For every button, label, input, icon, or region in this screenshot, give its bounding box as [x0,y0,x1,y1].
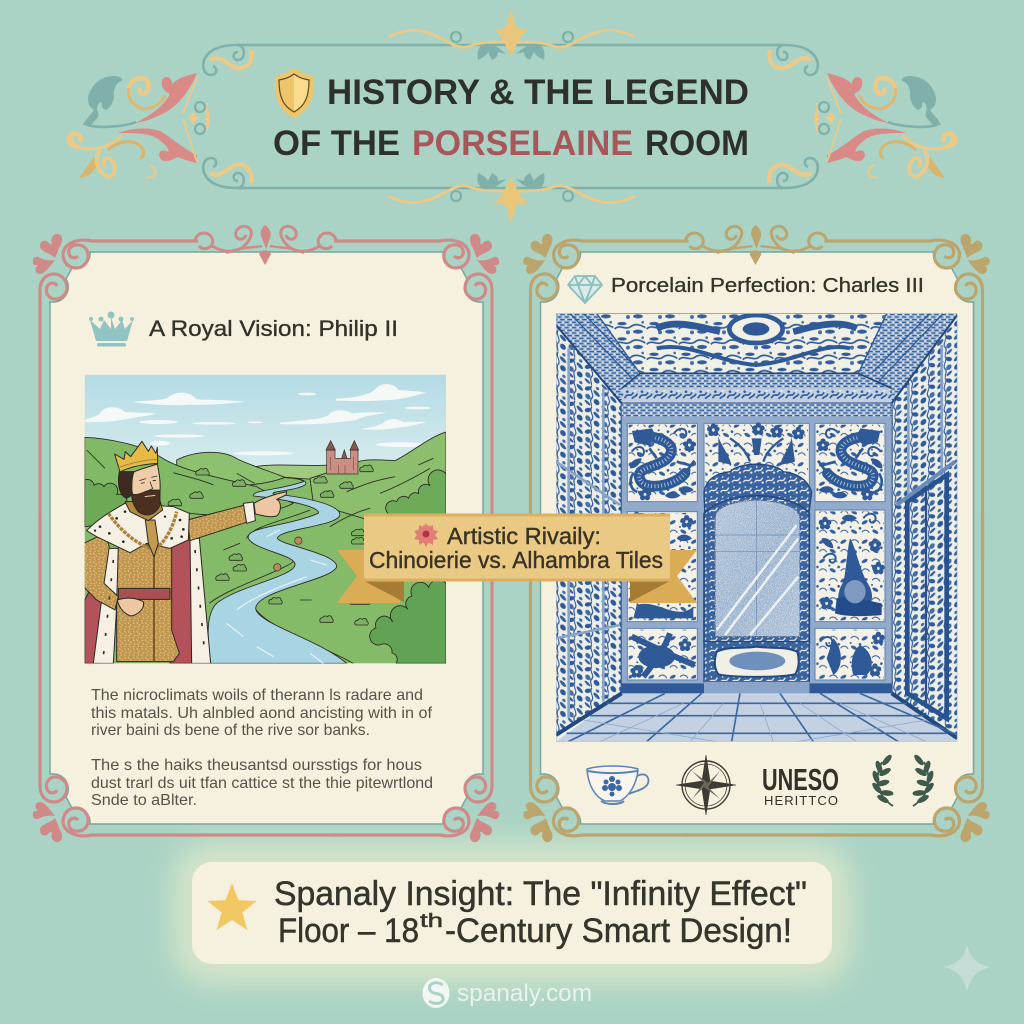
illustration: porcelain room [556,313,957,742]
baseboard [622,683,892,693]
icon: shield [275,68,314,118]
right arm [187,505,248,541]
castle [326,441,359,474]
facial features [139,476,157,490]
background glow [172,842,852,984]
figural tiles [630,512,885,678]
heading: A Royal Vision: A Royal Vision: Philip II [149,316,398,341]
cuff [243,502,255,523]
icon: teacup [587,766,648,804]
face [132,464,161,494]
body text: river baini ds bene of the rive sor banks. [91,722,370,739]
dragon tiles [628,428,885,500]
icon: compass rose [676,755,736,815]
sky [85,375,446,475]
king figure [80,441,287,663]
wall panels [627,423,885,680]
heading: Porcelain Perfection: Porcelain Perfection: Charles III [611,275,924,297]
clouds [85,384,431,455]
mirror frame [704,496,809,642]
collar ermine [87,503,189,553]
title: PORSELAINE [412,124,633,163]
footer logo: spanaly.com: spanaly.com [457,980,592,1007]
river [208,477,347,663]
body text: dust trarl ds uit tfan cattice st the thie pitewrtlond [91,775,433,792]
hand on belt [117,598,144,616]
mirror base cartouche [704,642,809,682]
card frame: gold [523,225,990,842]
ribbon text: Chinoierie vs. Alhambra Tiles [369,547,663,573]
foreground tree [370,580,446,663]
ermine trim [93,538,211,663]
left wall [556,325,622,735]
tunic [117,545,179,662]
ribbon tails [337,550,697,603]
high gold collar [125,501,163,521]
crown [115,441,158,472]
mirror crest [704,464,812,518]
ground and hills [85,432,446,663]
ceiling [556,313,957,403]
mirror glass [715,500,800,637]
vase motif panel [707,422,805,465]
title [273,73,749,163]
icon: laurel wreath [871,753,935,806]
hair [118,472,134,498]
body text [91,687,433,809]
icon: heritage logo [762,762,839,808]
icon: red flower [414,523,438,547]
door [897,462,955,718]
floor [556,693,957,742]
body text: this matals. Uh alnbled aond ancisting with in of [91,705,433,722]
icon: crown [89,312,134,346]
left arm [84,537,118,610]
pointing hand [254,492,287,517]
ribbon text [369,523,663,573]
beard [132,490,160,515]
body text: The s the haiks theusantsd oursstigs for hous [91,757,422,774]
bushes [168,465,373,625]
panel flecks [629,425,884,679]
body text: Snde to aBlter. [91,792,197,809]
icon: sparkle [943,944,991,992]
insight text: Spanaly Insight: The "Infinity Effect" [274,875,807,913]
insight text [274,875,807,950]
card frame: rose [33,225,499,842]
ribbon banner: artistic rivalry [337,514,697,603]
insight text: -Century Smart Design! [445,912,792,950]
back wall [622,403,892,693]
header ornament frame [69,10,955,223]
icon: heritage logo: HERITTCO [764,793,838,808]
panel: right card Charles III [523,225,990,842]
ribbon body [364,514,670,581]
illustration: king and river valley [80,375,446,663]
cape [85,540,192,663]
ribbon text: Artistic Rivaily: [447,523,601,549]
insight text: th [420,911,443,932]
ermine spots [103,550,205,657]
body text: The nicroclimats woils of therann ls radare and [91,687,423,704]
ornament: left flourish [69,73,210,178]
insight text: Floor – 18 [278,912,419,950]
panel: left card Philip II [33,225,499,842]
icon: heritage logo: UNESO [762,762,839,797]
ornament: right flourish [814,73,955,178]
belt [118,588,170,599]
callout: insight box [192,862,832,964]
title: HISTORY & THE LEGEND [327,73,749,112]
right wall [892,315,957,738]
icon: star [207,883,257,930]
icon: diamond [568,276,602,303]
title: OF THE [273,124,400,163]
title: ROOM [645,124,749,163]
